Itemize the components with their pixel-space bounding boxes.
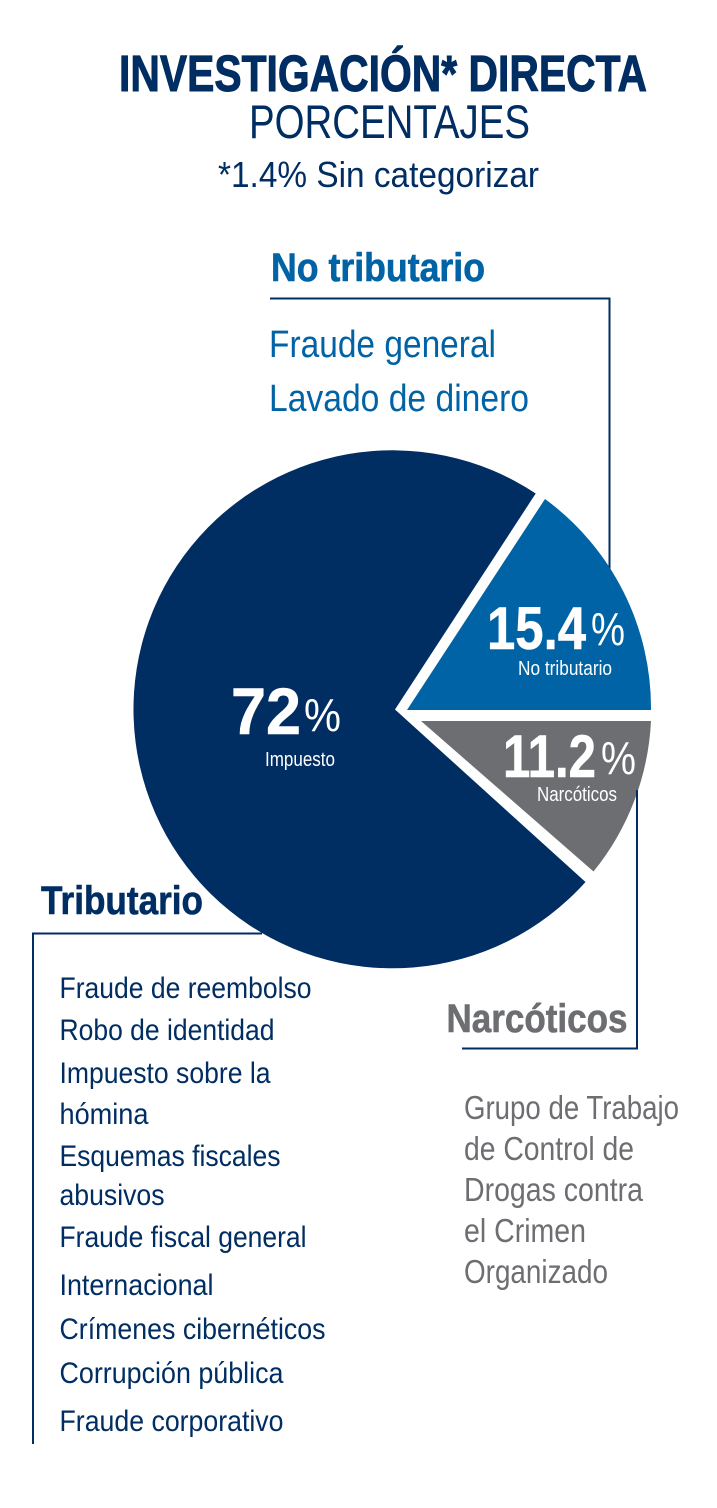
label: 11.2%: 11.2 (503, 723, 596, 790)
list: tributario: Corrupción pública (60, 1357, 284, 1390)
list: tributario: hómina (60, 1098, 149, 1131)
list: narcóticos: Organizado (464, 1253, 608, 1290)
heading: tributario: Tributario (41, 879, 203, 923)
list: narcóticos: Drogas contra (464, 1171, 644, 1208)
list: tributario: Esquemas fiscales (60, 1140, 280, 1173)
heading: narcóticos: Narcóticos (446, 997, 628, 1041)
subtitle: PORCENTAJES (249, 95, 530, 148)
list: narcóticos: el Crimen (464, 1212, 586, 1249)
list: narcóticos: de Control de (464, 1130, 634, 1167)
connector: narcóticos (462, 790, 637, 1048)
panel: tributario (33, 879, 326, 1444)
list: no tributario: Fraude general (269, 324, 496, 366)
heading: no tributario: No tributario (271, 246, 485, 290)
list: tributario: Fraude fiscal general (60, 1221, 306, 1254)
panel: narcóticos (446, 790, 679, 1290)
connector: tributario (33, 934, 262, 1444)
list: narcóticos: Grupo de Trabajo (464, 1089, 679, 1126)
title block (119, 45, 647, 195)
pie chart (133, 450, 651, 968)
label: 72%: Impuesto (265, 749, 335, 771)
label: 11.2%: Narcóticos (537, 784, 617, 806)
list: tributario: abusivos (60, 1179, 164, 1212)
connector: no tributario (270, 298, 610, 570)
label: 72%: 72 (231, 674, 301, 748)
footnote: *1.4% Sin categorizar (218, 154, 539, 195)
list: no tributario: Lavado de dinero (269, 378, 529, 420)
label: 11.2% (503, 723, 636, 806)
label: 15.4%: 15.4 (487, 595, 587, 662)
slice: narcóticos 11.2% (421, 721, 651, 872)
list: tributario: Crímenes cibernéticos (60, 1313, 326, 1346)
list: tributario (60, 972, 326, 1438)
label: 15.4%: No tributario (518, 658, 612, 680)
label: 15.4% (487, 595, 625, 680)
list: tributario: Fraude de reembolso (60, 972, 312, 1005)
list: tributario: Internacional (60, 1269, 214, 1302)
label: 72%: % (304, 689, 341, 741)
list: tributario: Impuesto sobre la (60, 1057, 271, 1090)
label: 11.2%: % (601, 732, 636, 784)
list: narcóticos (464, 1089, 679, 1290)
slice: no tributario 15.4% (407, 499, 651, 710)
list: tributario: Fraude corporativo (60, 1405, 284, 1438)
slice: impuesto 72% (133, 450, 585, 968)
list: no tributario (269, 324, 529, 420)
label: 72% (231, 674, 341, 771)
list: tributario: Robo de identidad (60, 1014, 274, 1047)
label: 15.4%: % (591, 603, 625, 655)
panel: no tributario (269, 246, 610, 570)
